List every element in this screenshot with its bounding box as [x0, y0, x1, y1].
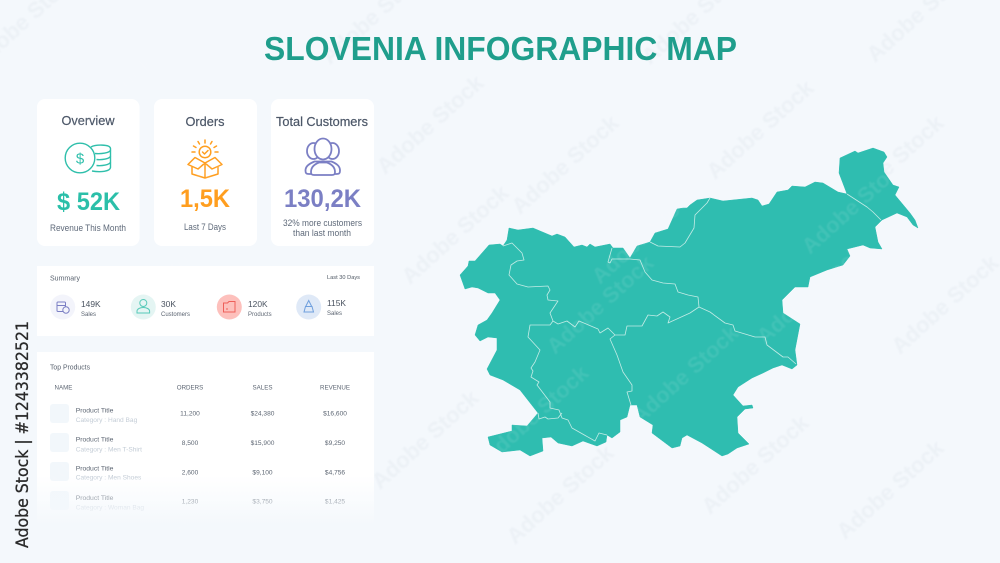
map: Slovenia — [460, 148, 918, 456]
watermark pattern, background layer: Adobe Stock — [832, 435, 949, 544]
table header — [55, 384, 350, 392]
table row: hand bag — [50, 404, 347, 424]
map region borders — [503, 194, 881, 441]
table row: men t-shirt: 8,500 — [182, 440, 199, 447]
panel: summary — [37, 266, 374, 336]
stat: products: 120K — [248, 299, 268, 309]
table row: woman bag: 1,230 — [182, 498, 199, 506]
table row: men shoes: Category : Men Shoes — [76, 474, 142, 482]
table row: men t-shirt — [50, 433, 345, 454]
watermark pattern, background layer: Adobe Stock — [397, 180, 514, 289]
panel: total customers — [271, 99, 374, 246]
watermark pattern, background layer: Adobe Stock — [697, 410, 814, 519]
caption: customers second line: than last month — [293, 228, 351, 238]
table row: woman bag: $3,750 — [252, 498, 273, 506]
icon: group of people — [306, 138, 340, 175]
table row: hand bag: $16,600 — [323, 410, 347, 418]
watermark pattern, background layer: Adobe Stock — [502, 440, 619, 549]
table row: men shoes: Product Title — [76, 466, 114, 472]
icon: coins: $ — [76, 150, 85, 168]
label: last 30 days: Last 30 Days — [327, 275, 360, 281]
watermark pattern, over content: Adobe Stock — [627, 320, 744, 429]
value: customers: 130,2K — [284, 185, 361, 213]
icon: open box with check — [188, 140, 222, 178]
panel: orders — [154, 99, 257, 246]
heading: total customers: Total Customers — [276, 115, 368, 129]
table row: men shoes: $4,756 — [325, 470, 345, 476]
value: revenue: $ 52K — [57, 188, 120, 216]
watermark pattern, over content: Adobe Stock — [587, 180, 704, 289]
stat: products: Products — [248, 312, 272, 318]
watermark pattern, over content: Adobe Stock — [177, 90, 294, 199]
watermark pattern, over content: Adobe Stock — [227, 235, 344, 344]
panel: top products table — [37, 352, 374, 525]
heading: overview: Overview — [62, 114, 115, 128]
panel: overview — [37, 99, 140, 246]
table row: men t-shirt: Category : Men T-Shirt — [76, 446, 142, 454]
value: orders: 1,5K — [180, 185, 230, 213]
stat: customers: 30K — [161, 299, 176, 309]
watermark pattern, over content: Adobe Stock — [477, 360, 594, 469]
watermark pattern, over content: Adobe Stock — [167, 430, 284, 539]
watermark pattern, over content: Adobe Stock — [542, 250, 659, 359]
table row: hand bag: 11,200 — [180, 410, 200, 418]
table row: woman bag: $1,425 — [325, 498, 345, 506]
table row: hand bag: Product Title — [76, 408, 114, 414]
caption: orders: Last 7 Days — [184, 222, 226, 232]
stat: sales — [50, 294, 101, 320]
stock id label, vertical: Adobe Stock | #1243382521 — [13, 321, 33, 548]
watermark pattern, over content: Adobe Stock — [97, 230, 214, 339]
table row: men t-shirt: $9,250 — [325, 440, 345, 447]
watermark pattern, background layer: Adobe Stock — [702, 75, 819, 184]
watermark pattern, background layer: Adobe Stock — [887, 250, 1000, 359]
table row: woman bag — [50, 491, 345, 512]
watermark pattern, over content: Adobe Stock — [42, 50, 159, 159]
caption: revenue: Revenue This Month — [50, 223, 126, 233]
icon: coins — [65, 143, 110, 173]
table row: men shoes — [50, 462, 345, 482]
table row: woman bag: Category : Woman Bag — [76, 504, 144, 512]
watermark pattern, background layer: Adobe Stock — [507, 110, 624, 219]
title: SLOVENIA INFOGRAPHIC MAP — [264, 30, 737, 67]
table row: woman bag: Product Title — [76, 495, 114, 502]
table row: men shoes: 2,600 — [182, 470, 199, 476]
table header: SALES — [253, 384, 272, 392]
stat: customers: Customers — [161, 312, 190, 318]
stat: sales: Sales — [81, 312, 96, 318]
watermark pattern, background layer: Adobe Stock — [832, 110, 949, 219]
heading: summary: Summary — [50, 274, 80, 282]
stat: customers — [131, 294, 190, 320]
table row: hand bag: Category : Hand Bag — [76, 417, 138, 424]
table header: NAME — [55, 384, 72, 392]
stat: sales second — [296, 294, 346, 320]
heading: top products: Top Products — [50, 362, 90, 372]
stat: sales second: Sales — [327, 311, 342, 317]
map landmass — [460, 148, 918, 456]
stat: sales: 149K — [81, 299, 101, 309]
watermark pattern, background layer: Adobe Stock — [367, 385, 484, 494]
table row: men t-shirt: $15,900 — [251, 440, 275, 447]
table row: hand bag: $24,380 — [251, 410, 275, 418]
watermark pattern, over content: Adobe Stock — [752, 240, 869, 349]
table fade overlay — [37, 475, 374, 525]
stat: products — [217, 294, 272, 320]
table row: men t-shirt: Product Title — [76, 436, 114, 444]
caption: customers: 32% more customers — [283, 218, 362, 228]
watermark pattern, over content — [37, 50, 914, 539]
watermark pattern, background layer: Adobe Stock — [372, 70, 489, 179]
watermark pattern, over content: Adobe Stock — [37, 385, 154, 494]
table row: men shoes: $9,100 — [252, 470, 273, 476]
stat: sales second: 115K — [327, 298, 346, 308]
table header: REVENUE — [320, 384, 350, 392]
heading: orders: Orders — [186, 115, 224, 129]
watermark pattern, over content: Adobe Stock — [797, 150, 914, 259]
table header: ORDERS — [177, 384, 203, 392]
